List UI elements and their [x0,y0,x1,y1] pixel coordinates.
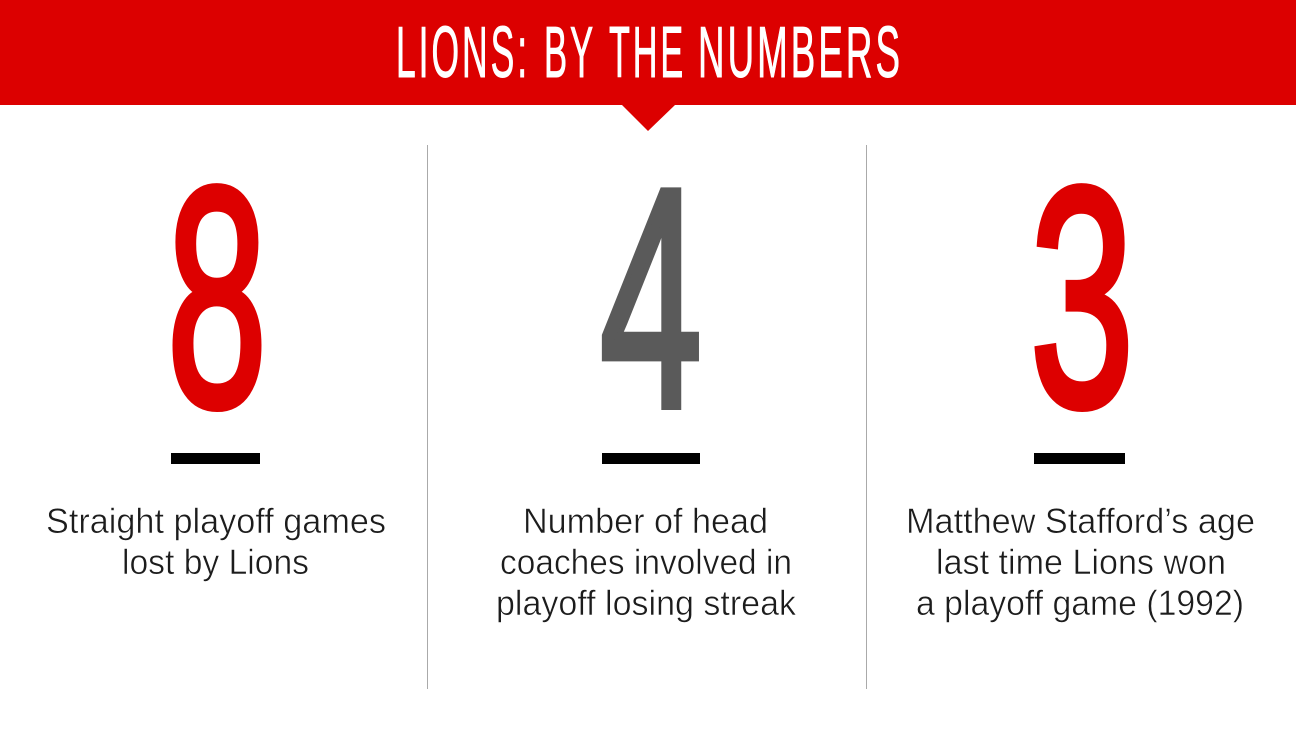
panel: Stafford's age [906,124,1255,623]
title [396,13,903,93]
description [906,502,1255,623]
description: lost by Lions [122,543,309,582]
description: coaches involved in [500,543,792,582]
description [46,502,386,582]
number 4: 4 [600,125,702,473]
description: a playoff game (1992) [916,584,1244,623]
description: Matthew Stafford’s age [906,502,1255,541]
bar [171,453,260,464]
number 8: 8 [167,124,267,472]
number 3: 3 [1030,124,1134,472]
bar [1034,453,1125,464]
description: last time Lions won [936,543,1226,582]
description: playoff losing streak [496,584,796,623]
description [496,502,796,623]
header banner [0,0,1296,131]
title: LIONS: [396,13,530,93]
bar [602,453,700,464]
title: THE [609,13,686,93]
panel: straight playoff losses [46,124,386,582]
title: BY [544,13,596,93]
title: NUMBERS [698,13,903,93]
description: Number of head [523,502,768,541]
description: Straight playoff games [46,502,386,541]
panel: head coaches [496,125,796,623]
